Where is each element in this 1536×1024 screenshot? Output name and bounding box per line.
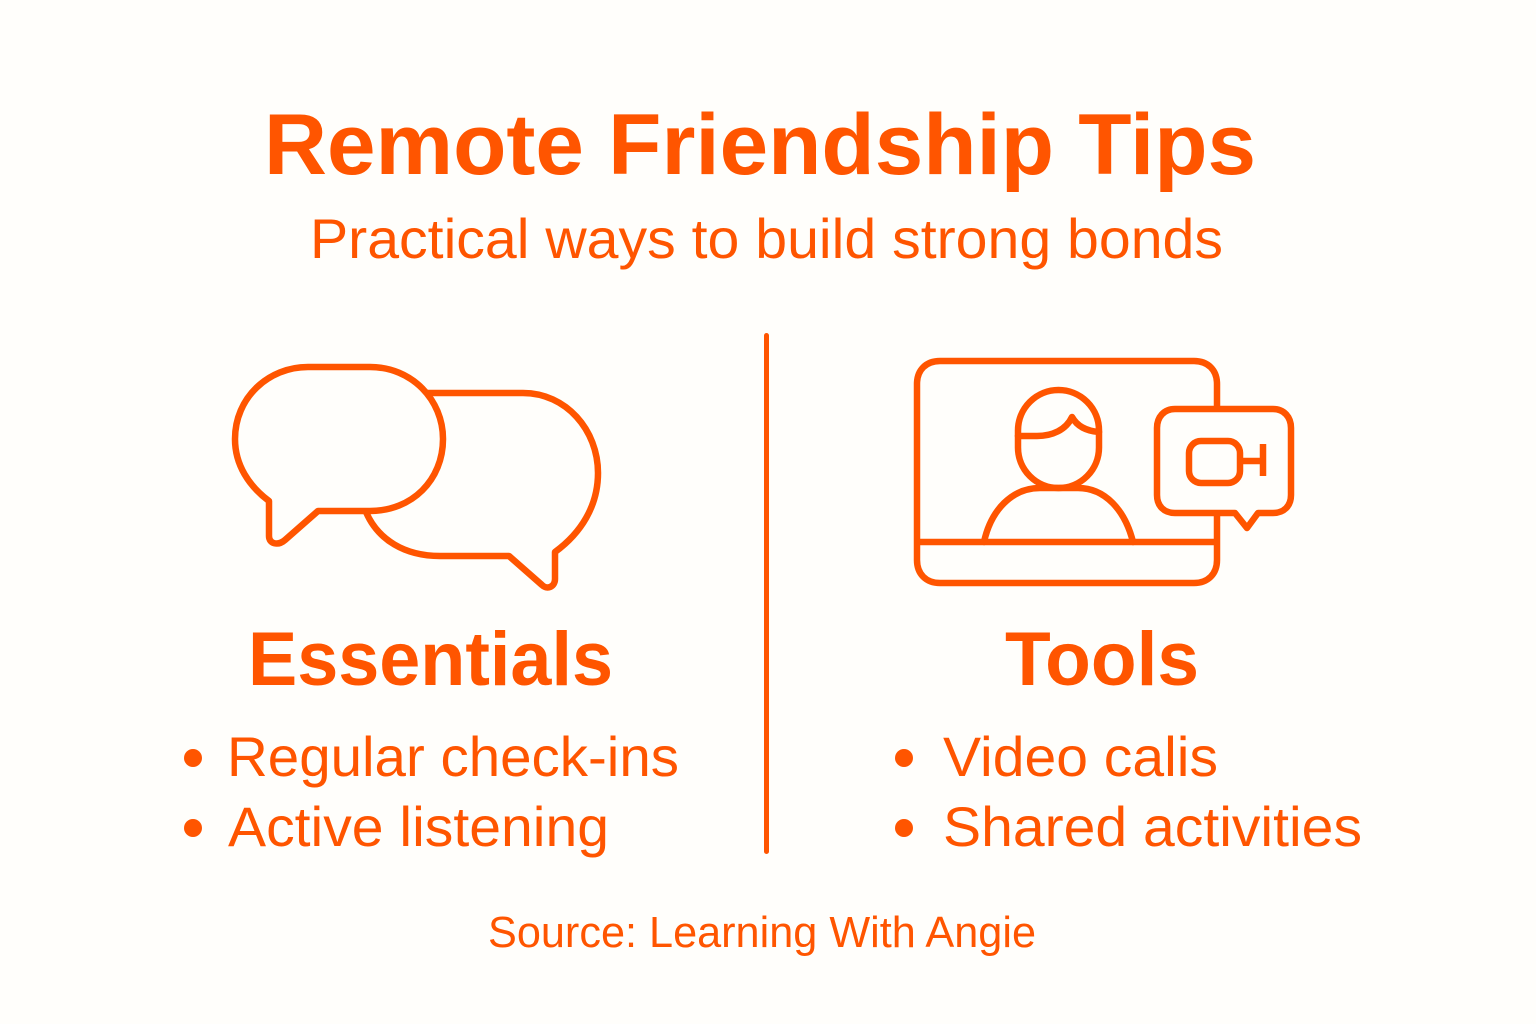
panel: essentials	[184, 367, 679, 858]
center divider	[764, 333, 769, 854]
bullet list: essentials: Active listening	[228, 795, 609, 858]
screen frame	[917, 361, 1217, 583]
title: Remote Friendship Tips	[264, 97, 1256, 193]
bullet list: tools: Shared activities	[943, 795, 1362, 858]
camera speech bubble	[1157, 409, 1291, 528]
icon: two overlapping speech bubbles	[235, 367, 598, 587]
icon: video call screen	[917, 361, 1291, 583]
bullet list: essentials: Regular check-ins	[227, 725, 679, 788]
heading: tools: Tools	[1005, 617, 1199, 702]
bullet list: essentials	[184, 725, 679, 858]
heading: essentials: Essentials	[248, 617, 613, 702]
panel: tools	[895, 361, 1362, 858]
person	[984, 390, 1133, 542]
bullet list: tools	[895, 725, 1362, 858]
subtitle: Practical ways to build strong bonds	[310, 207, 1223, 270]
source line: Source: Learning With Angie	[488, 908, 1036, 957]
bullet list: tools: Video calis	[943, 725, 1218, 788]
